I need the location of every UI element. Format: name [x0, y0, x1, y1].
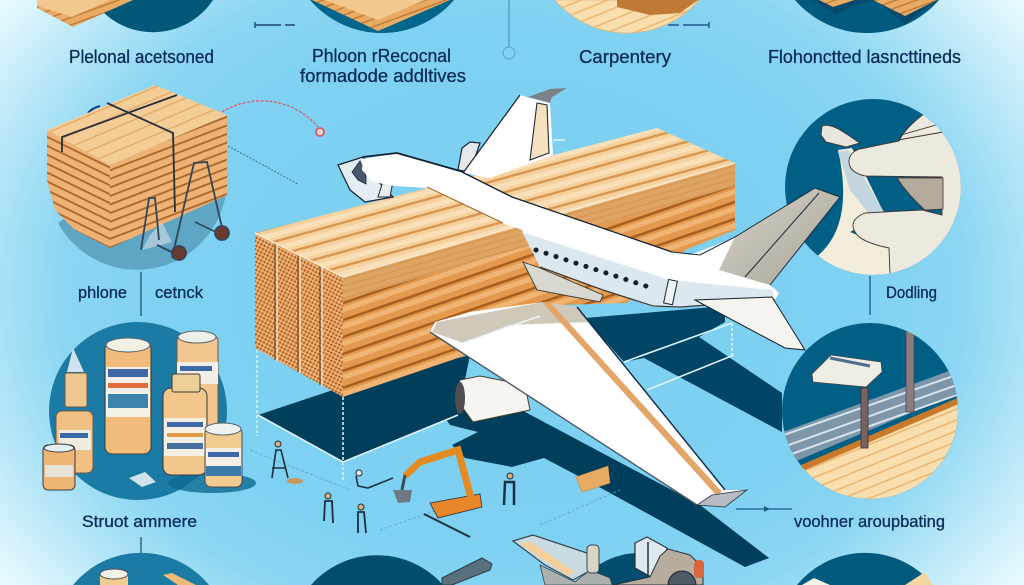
heading: label 1: Plelonal acetsoned — [69, 46, 214, 67]
chart: laminated wood stack — [255, 128, 735, 397]
shadow: wing — [430, 395, 769, 567]
tool handle — [815, 148, 895, 280]
connector: top right — [668, 22, 709, 28]
panel: aircraft hand tool circle — [785, 99, 965, 280]
panel: bottom right circle — [797, 553, 933, 585]
connector: lower right — [736, 506, 792, 512]
panel: top left wood board — [37, 0, 213, 32]
panel: adhesive bottles — [43, 322, 256, 500]
connector: dotted line — [228, 146, 298, 184]
panel: bottom second circle — [311, 555, 492, 585]
shadow: platform — [258, 355, 470, 462]
far engine — [458, 142, 480, 172]
panel: top second wood board — [310, 0, 454, 33]
connector: right vertical — [869, 276, 871, 315]
nose and cockpit — [338, 157, 393, 202]
icon: workers — [272, 441, 514, 533]
vertical tail — [463, 88, 567, 178]
connector: lower left vertical — [140, 537, 142, 553]
connector: left vertical — [140, 272, 142, 316]
guide lines — [250, 323, 734, 530]
heading: label 4: Flohonctted lasncttineds — [768, 46, 961, 67]
heading: label 2: Phloon rRecocnal — [312, 45, 451, 66]
connector: top center — [508, 0, 510, 47]
shadow: tail band — [585, 306, 782, 432]
icon: hand cart — [141, 162, 229, 260]
arrow: red dashed curve — [222, 101, 324, 136]
bottle: right — [205, 423, 242, 487]
conveyor — [513, 535, 612, 585]
heading: label 3: Carpentery — [579, 46, 672, 67]
machine cab — [613, 537, 704, 585]
wing — [430, 302, 747, 507]
panel: wooden post circle — [782, 323, 958, 499]
icon: excavator — [393, 450, 482, 537]
panel: bottom third circle — [577, 553, 703, 585]
gloved hand — [849, 110, 965, 275]
panel: bottom left circle — [73, 553, 209, 585]
heading: label 8: voohner aroupbating — [794, 513, 945, 531]
stabilizer near — [695, 297, 805, 350]
icon: sign — [812, 355, 882, 387]
heading: label 5 — [78, 284, 204, 302]
heading: label 5: phlone — [78, 284, 127, 302]
panel: carpentry circle — [555, 0, 699, 33]
illustration: airplane — [338, 88, 840, 507]
bottle: small left — [43, 444, 75, 490]
fuselage — [338, 153, 779, 307]
bottle: back — [177, 331, 218, 427]
heading: label 6: Dodling — [886, 284, 937, 302]
bottle: front — [163, 374, 207, 475]
bottle: big — [105, 338, 151, 454]
stabilizer far — [672, 188, 840, 285]
icon: wood block — [576, 466, 610, 492]
windows — [536, 250, 652, 288]
strap — [62, 95, 177, 212]
heading: label 2: formadode addltives — [300, 65, 466, 86]
thumb — [897, 178, 943, 210]
tool blade — [821, 125, 860, 147]
heading: label 7: Struot ammere — [82, 513, 197, 531]
engine — [455, 376, 530, 422]
heading: label 2 — [300, 45, 466, 86]
flap — [523, 262, 603, 302]
bottle: medium left — [56, 411, 93, 473]
heading: label 5: cetnck — [155, 284, 204, 302]
cap — [129, 472, 156, 487]
bottle: small cone — [65, 348, 87, 407]
icon: bottom machinery — [513, 535, 704, 585]
panel: top right wood circle — [795, 0, 939, 33]
connector: top left — [255, 22, 295, 28]
panel: strapped lumber box — [47, 85, 229, 270]
marker: top center — [503, 47, 515, 59]
